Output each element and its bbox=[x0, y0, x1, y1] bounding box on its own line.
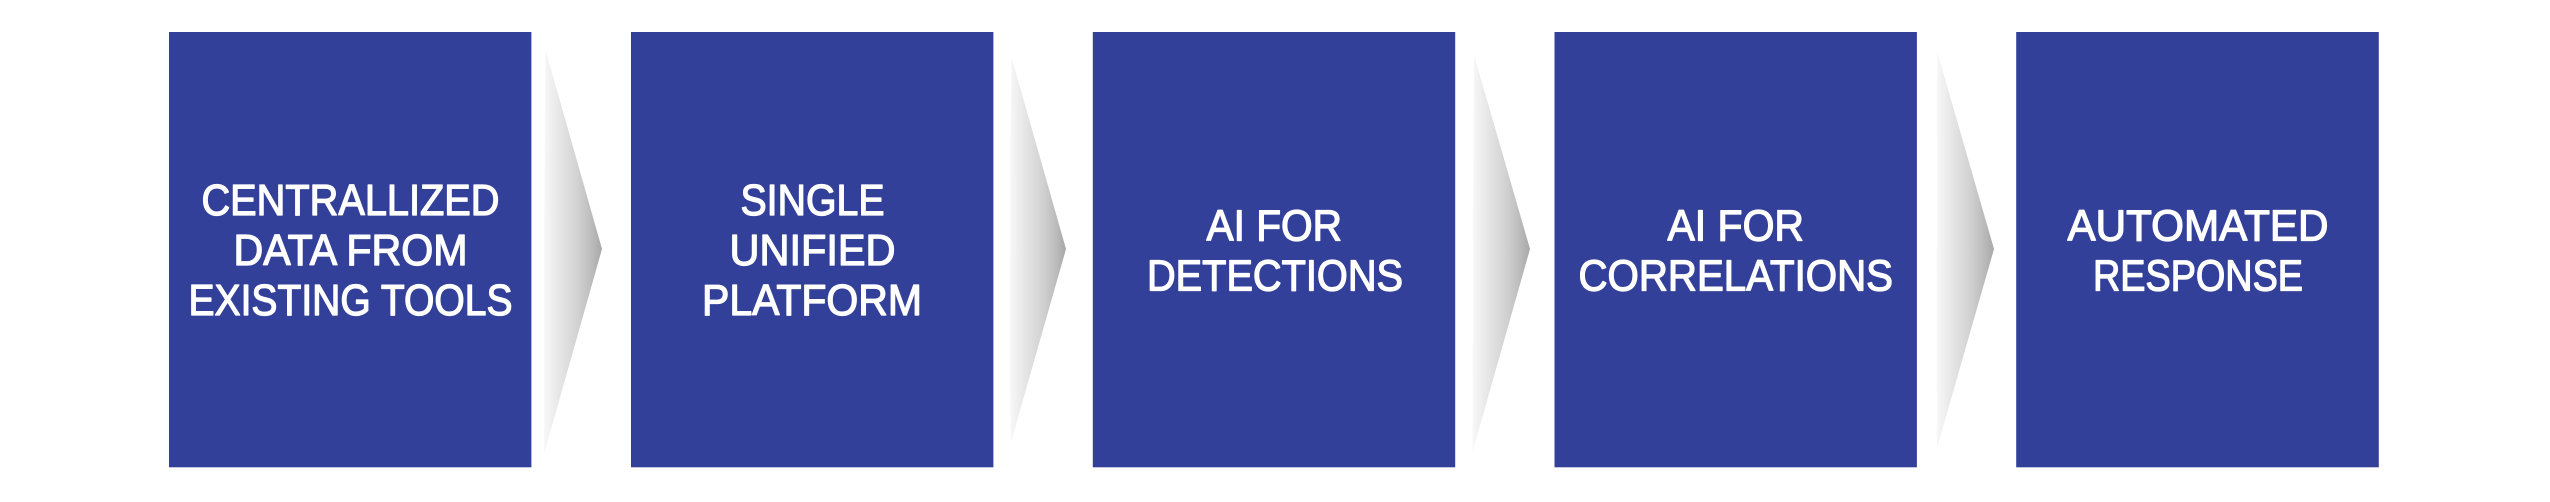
arrow: step 3 to step 4 bbox=[1472, 55, 1530, 452]
panel: automated response bbox=[2016, 32, 2379, 467]
text: single unified platform: SINGLE bbox=[740, 176, 884, 225]
arrow: step 4 to step 5 bbox=[1936, 52, 1994, 448]
text: automated response: AUTOMATED bbox=[2068, 202, 2328, 251]
panel: AI for detections bbox=[1093, 32, 1455, 467]
text: centralized data from existing tools: CENTRALLIZED bbox=[202, 176, 500, 225]
text: centralized data from existing tools: EXISTING TOOLS bbox=[188, 276, 512, 325]
text: automated response bbox=[2068, 202, 2328, 301]
arrow: step 2 to step 3 bbox=[1010, 58, 1066, 442]
text: AI for detections: AI FOR bbox=[1206, 202, 1342, 251]
text: AI for correlations bbox=[1578, 202, 1893, 301]
text: single unified platform: PLATFORM bbox=[702, 276, 922, 325]
text: AI for correlations: AI FOR bbox=[1668, 202, 1804, 251]
text: AI for correlations: CORRELATIONS bbox=[1578, 252, 1893, 301]
text: centralized data from existing tools bbox=[188, 176, 512, 325]
text: single unified platform: UNIFIED bbox=[730, 226, 896, 275]
text: single unified platform bbox=[702, 176, 922, 325]
panel: centralized data from existing tools bbox=[169, 32, 531, 467]
text: AI for detections bbox=[1147, 202, 1403, 301]
text: automated response: RESPONSE bbox=[2093, 252, 2303, 301]
arrow: step 1 to step 2 bbox=[544, 50, 602, 454]
text: centralized data from existing tools: DATA FROM bbox=[234, 226, 468, 275]
text: AI for detections: DETECTIONS bbox=[1147, 252, 1403, 301]
panel: AI for correlations bbox=[1554, 32, 1917, 467]
panel: single unified platform bbox=[631, 32, 993, 467]
